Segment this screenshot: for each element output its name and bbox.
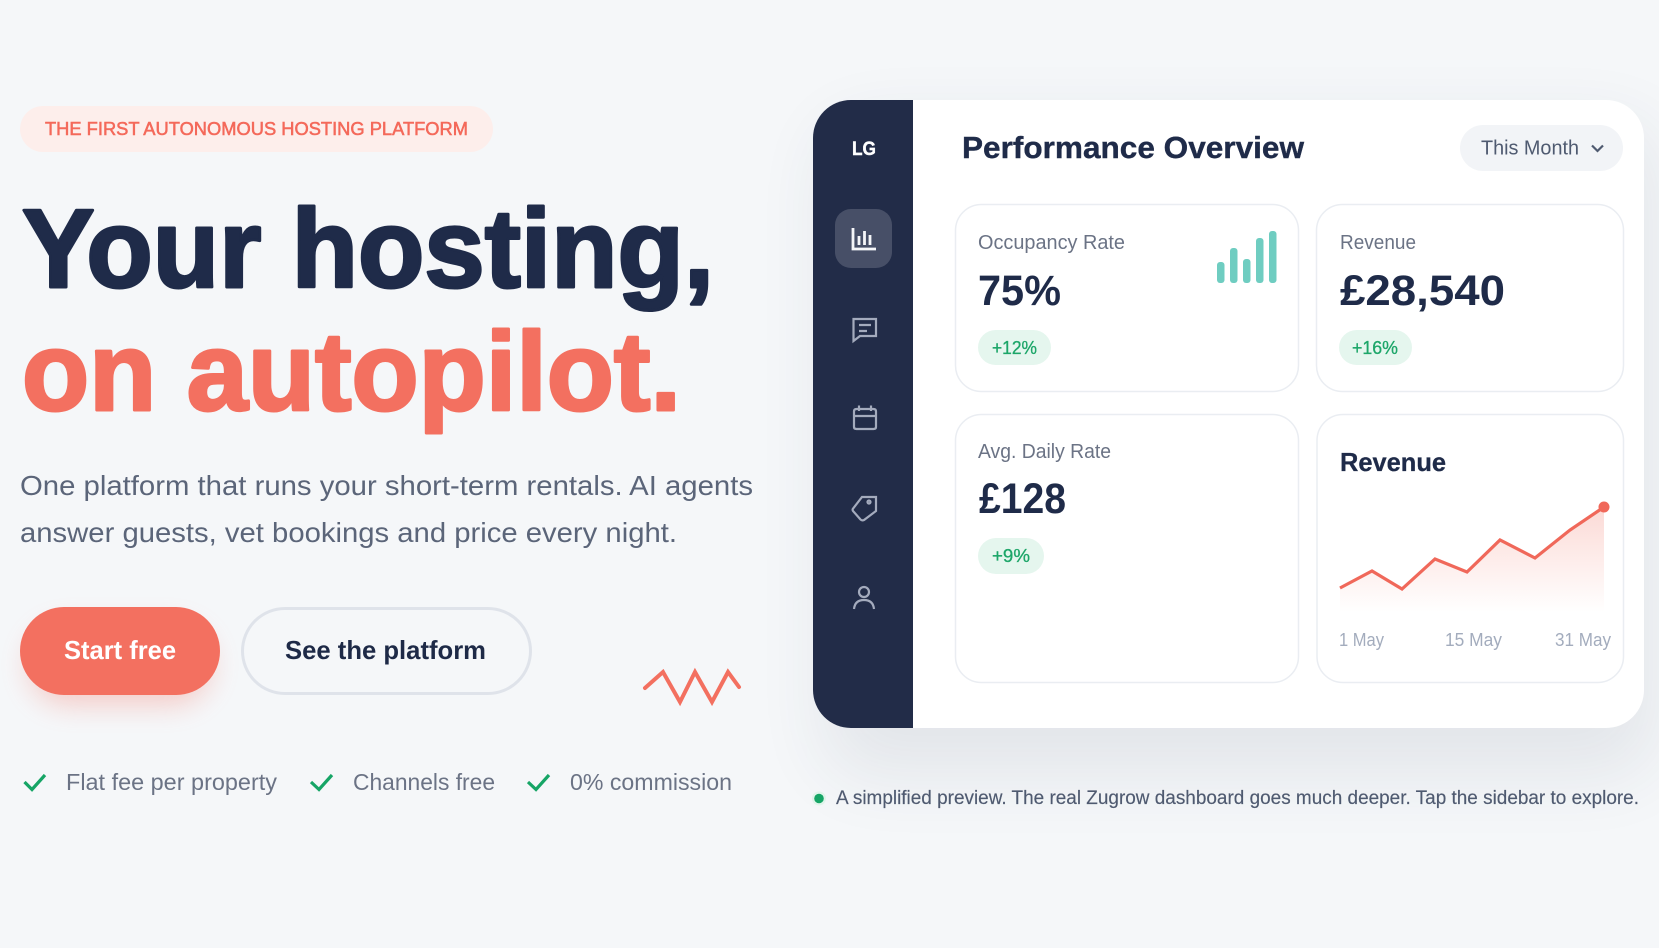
line chart: [1340, 507, 1604, 589]
badge: +12%: +12%: [992, 338, 1037, 358]
icon: check: [528, 775, 549, 790]
feature: flat fee: Flat fee per property: [66, 769, 278, 795]
button: see the platform: See the platform: [285, 635, 486, 665]
card: revenue chart: [1317, 414, 1624, 682]
card: occupancy rate: [956, 204, 1298, 392]
card: revenue: Revenue: [1340, 232, 1416, 254]
decorative zigzag: [645, 672, 739, 702]
card: occupancy rate: Occupancy Rate: [978, 232, 1125, 254]
dropdown: this month: This Month: [1481, 138, 1579, 160]
logo: LG: [852, 138, 876, 160]
axis labels: 31 May: [1555, 630, 1611, 650]
icon: messages: [854, 319, 876, 341]
icon: chart active: [835, 209, 892, 268]
button: see the platform: [242, 608, 530, 694]
card: revenue: [1316, 204, 1624, 392]
badge: eyebrow pill: THE FIRST AUTONOMOUS HOSTING PLATFORM: [45, 118, 468, 139]
panel: sidebar: [813, 100, 913, 728]
mini bar chart: [1217, 231, 1276, 283]
headline: [22, 187, 714, 434]
subheading text: [20, 470, 753, 548]
data point: [1598, 502, 1610, 512]
card: revenue: £28,540: [1340, 267, 1505, 315]
button: start free: [20, 607, 220, 705]
badge: +9%: [978, 538, 1044, 574]
footnote: A simplified preview. The real Zugrow dashboard goes much deeper. Tap the sidebar to explore.: [836, 788, 1639, 809]
badge: +12%: [978, 330, 1051, 365]
axis labels: 15 May: [1445, 630, 1502, 650]
badge: +16%: +16%: [1352, 338, 1398, 358]
badge: +16%: [1339, 330, 1412, 365]
button: start free: Start free: [64, 635, 176, 665]
icon: check: [311, 775, 332, 790]
badge: eyebrow pill: [20, 106, 493, 152]
feature: commission: 0% commission: [570, 769, 732, 795]
subheading text: answer guests, vet bookings and price every night.: [20, 517, 677, 548]
card: occupancy rate: 75%: [978, 267, 1061, 315]
card: average daily rate: Avg. Daily Rate: [978, 441, 1111, 463]
heading: performance overview: Performance Overview: [962, 130, 1305, 165]
area fill: [1340, 507, 1604, 612]
feature list: [24, 769, 732, 795]
icon: tag: [853, 497, 876, 520]
axis labels: 1 May: [1339, 630, 1384, 650]
card: average daily rate: [956, 414, 1298, 682]
panel: dashboard: [813, 100, 1644, 728]
axis labels: [1339, 630, 1611, 650]
feature: channels: Channels free: [353, 769, 495, 795]
card: average daily rate: £128: [979, 475, 1066, 523]
card: revenue chart: Revenue: [1340, 447, 1446, 477]
headline: on autopilot.: [22, 310, 681, 434]
dashboard shadow: [825, 125, 1655, 775]
subheading text: One platform that runs your short-term rentals. AI agents: [20, 470, 753, 501]
icon: calendar: [854, 406, 876, 429]
icon: check: [24, 775, 45, 790]
badge: +9%: +9%: [992, 546, 1030, 566]
headline: Your hosting,: [22, 187, 714, 311]
dropdown: this month: [1460, 125, 1623, 171]
icon: user: [854, 587, 874, 609]
